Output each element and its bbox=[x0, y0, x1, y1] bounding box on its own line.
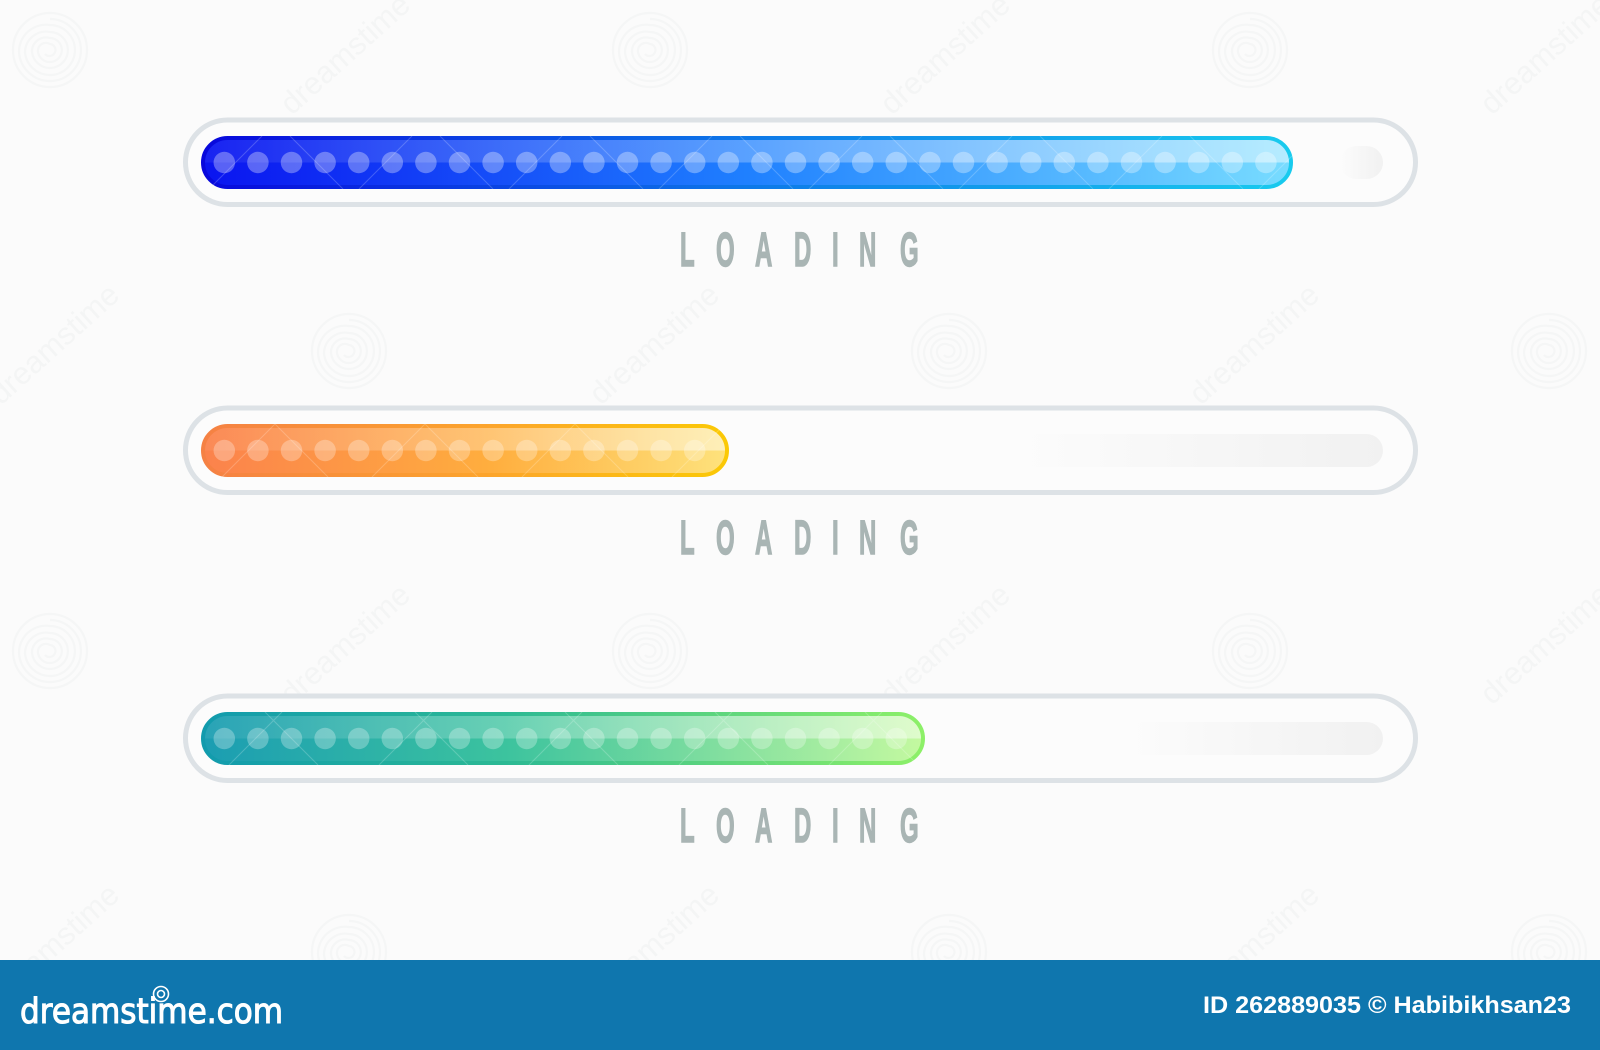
watermark pattern: dreamstime bbox=[1182, 877, 1326, 1011]
orange fill bbox=[203, 426, 727, 475]
footer banner bbox=[0, 960, 1600, 1050]
icon: spiral bbox=[154, 986, 168, 1002]
watermark pattern: dreamstime bbox=[582, 877, 726, 1011]
progress bar: blue bbox=[186, 120, 1416, 204]
brand logo text: dreamstime.com bbox=[20, 992, 283, 1032]
image id and credit: ID 262889035 © Habibikhsan23 bbox=[1203, 992, 1571, 1019]
watermark pattern: dreamstime bbox=[273, 577, 417, 711]
watermark pattern: dreamstime bbox=[873, 577, 1017, 711]
label: loading 1: LOADING bbox=[680, 224, 919, 277]
green fill bbox=[203, 714, 923, 763]
watermark pattern: dreamstime bbox=[582, 277, 726, 411]
progress bar: orange bbox=[186, 408, 1416, 492]
label: loading 3: LOADING bbox=[680, 800, 919, 853]
blue fill bbox=[203, 138, 1291, 187]
label: loading 2: LOADING bbox=[680, 512, 919, 565]
watermark pattern: dreamstime bbox=[1182, 277, 1326, 411]
progress bar: green bbox=[186, 696, 1416, 780]
